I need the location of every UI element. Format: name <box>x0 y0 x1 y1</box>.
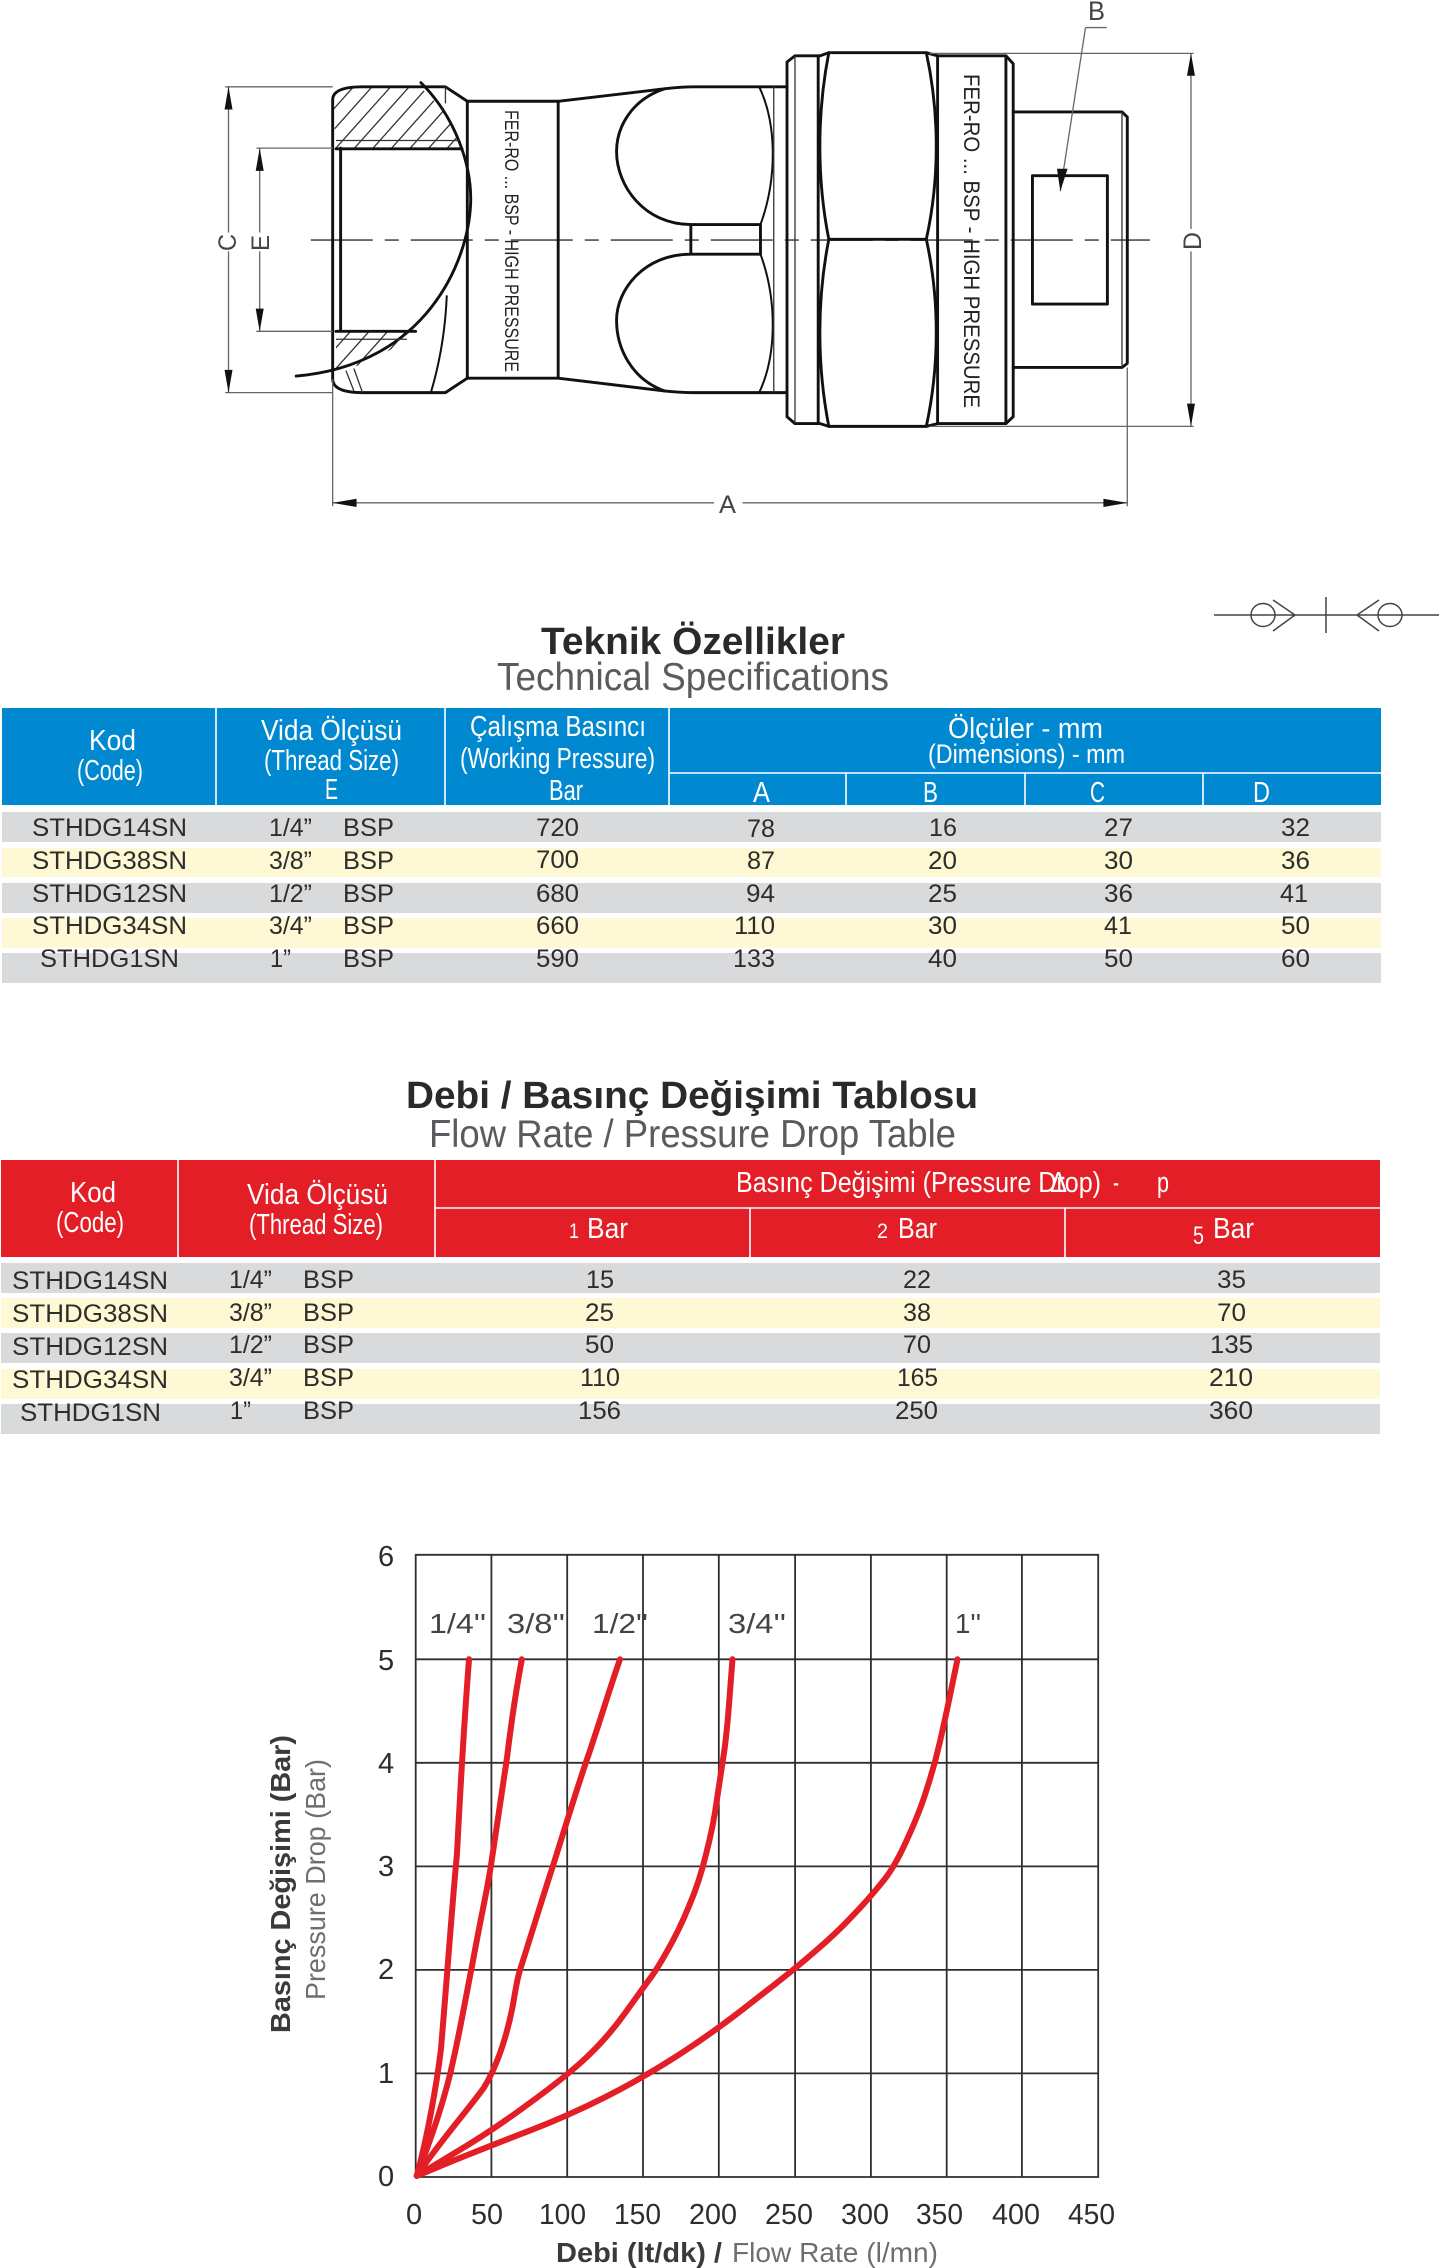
table rows: 1/2” <box>229 1331 272 1359</box>
table rows: 30 <box>1104 847 1133 875</box>
table rows <box>1 1263 1380 1434</box>
x axis ticks: 50 <box>471 2199 503 2231</box>
table rows: 25 <box>928 880 957 908</box>
table rows: 50 <box>1104 945 1133 973</box>
x axis ticks: 350 <box>916 2199 963 2231</box>
dimension letter E: E <box>247 235 275 251</box>
y axis ticks: 1 <box>378 2058 394 2090</box>
y axis ticks: 3 <box>378 1851 394 1883</box>
table rows: BSP <box>303 1364 354 1392</box>
table header: 1 <box>569 1220 579 1243</box>
dimension letter D: D <box>1179 232 1207 250</box>
y axis ticks: 5 <box>378 1645 394 1677</box>
table header: Kod <box>89 725 136 757</box>
table rows: 27 <box>1104 814 1133 842</box>
table rows: 680 <box>536 880 579 908</box>
y axis ticks: 6 <box>378 1541 394 1573</box>
table rows: 22 <box>903 1266 931 1294</box>
table header: Bar <box>587 1213 628 1245</box>
curve labels: 3/8'' <box>507 1608 565 1639</box>
table rows: BSP <box>343 945 394 973</box>
heading: technical specifications: Technical Specifications <box>497 656 889 699</box>
table header: Δ <box>1050 1167 1067 1199</box>
table rows: STHDG14SN <box>12 1267 168 1295</box>
table header: B <box>923 777 938 809</box>
table header: - <box>1113 1167 1119 1199</box>
table rows: 41 <box>1104 912 1132 940</box>
technical drawing: coupling <box>214 0 1207 519</box>
table rows: 87 <box>747 847 775 875</box>
x axis ticks: 300 <box>841 2199 889 2231</box>
x axis ticks: 200 <box>689 2199 737 2231</box>
curve labels: 1/2'' <box>592 1608 648 1639</box>
table rows: 15 <box>586 1266 614 1294</box>
table rows: BSP <box>303 1397 354 1425</box>
x axis ticks <box>406 2199 1115 2231</box>
chart grid <box>416 1555 1098 2177</box>
table rows: STHDG1SN <box>20 1399 161 1427</box>
table header: Bar <box>549 775 583 807</box>
table rows: 41 <box>1280 880 1308 908</box>
table rows: 3/4” <box>269 912 312 940</box>
table header: (Code) <box>56 1207 124 1239</box>
table rows: BSP <box>303 1331 354 1359</box>
table header <box>2 708 1381 809</box>
table rows: 50 <box>1281 912 1310 940</box>
x axis title <box>556 2237 938 2268</box>
table rows: STHDG34SN <box>32 912 187 940</box>
table rows: 3/8” <box>229 1299 272 1327</box>
table rows: 1/4” <box>229 1266 272 1294</box>
table rows: 70 <box>903 1331 931 1359</box>
table rows: 590 <box>536 945 579 973</box>
table header: Bar <box>898 1213 937 1245</box>
y axis title: Pressure Drop (Bar) <box>300 1759 331 2000</box>
table header: 5 <box>1193 1222 1204 1250</box>
table rows: 16 <box>929 814 957 842</box>
table rows: STHDG12SN <box>32 880 187 908</box>
table rows: STHDG14SN <box>32 814 187 842</box>
table header: Basınç Değişimi (Pressure Drop) <box>736 1167 1101 1199</box>
table header: E <box>325 774 338 806</box>
x axis title: Debi (lt/dk) / <box>556 2237 722 2268</box>
table rows: 156 <box>578 1397 621 1425</box>
engraved text on collar: FER-RO ... BSP - HIGH PRESSURE <box>959 74 984 408</box>
x axis ticks: 400 <box>992 2199 1040 2231</box>
table rows: 360 <box>1209 1397 1253 1425</box>
table rows: 36 <box>1104 880 1133 908</box>
table rows: STHDG38SN <box>12 1300 168 1328</box>
table rows: 60 <box>1281 945 1310 973</box>
icon: coupling symbol <box>1214 597 1439 633</box>
y axis ticks: 4 <box>378 1748 394 1780</box>
x axis ticks: 0 <box>406 2199 422 2231</box>
curve: 3/8 inch <box>417 1659 522 2176</box>
table rows: 32 <box>1281 814 1310 842</box>
table rows <box>2 812 1381 983</box>
heading: technical specifications <box>497 620 889 699</box>
table header: (Dimensions) - mm <box>928 739 1125 769</box>
table header: (Working Pressure) <box>460 743 655 775</box>
y axis title <box>265 1735 331 2033</box>
table rows: BSP <box>343 814 394 842</box>
table rows: STHDG1SN <box>40 945 179 973</box>
table rows: 660 <box>536 912 579 940</box>
table rows: BSP <box>343 880 394 908</box>
table rows: 3/8” <box>269 847 312 875</box>
heading: flow rate table: Debi / Basınç Değişimi Tablosu <box>406 1075 978 1117</box>
table rows: 35 <box>1217 1266 1246 1294</box>
table rows: BSP <box>343 847 394 875</box>
table rows: BSP <box>303 1299 354 1327</box>
threaded tail with flat <box>1013 112 1127 367</box>
table rows: 133 <box>733 945 775 973</box>
table rows: 250 <box>895 1397 938 1425</box>
table rows: 20 <box>928 847 957 875</box>
y axis ticks: 2 <box>378 1954 394 1986</box>
heading: technical specifications: Teknik Özellikler <box>541 620 845 663</box>
table header: (Thread Size) <box>264 745 399 777</box>
curve: 1/2 inch <box>417 1659 620 2176</box>
x axis title: Flow Rate (l/mn) <box>732 2237 938 2268</box>
table header: Kod <box>70 1177 116 1209</box>
table: flow rate and pressure drop <box>1 1160 1380 1434</box>
hatching <box>280 88 501 374</box>
table rows: 38 <box>903 1299 931 1327</box>
x axis ticks: 100 <box>539 2199 586 2231</box>
curve: 3/4 inch <box>417 1659 732 2176</box>
table header: Vida Ölçüsü <box>261 715 402 747</box>
table header: A <box>753 777 771 809</box>
chart curves <box>417 1659 958 2176</box>
y axis title: Basınç Değişimi (Bar) <box>265 1735 296 2033</box>
curve: 1/4 inch <box>417 1659 469 2176</box>
table rows: BSP <box>343 912 394 940</box>
table rows: STHDG12SN <box>12 1333 168 1361</box>
table rows: 70 <box>1217 1299 1246 1327</box>
dimension letter C: C <box>214 234 242 251</box>
table rows: 36 <box>1281 847 1310 875</box>
x axis ticks: 250 <box>765 2199 813 2231</box>
table rows: 25 <box>585 1299 614 1327</box>
table rows: 1/4” <box>269 814 312 842</box>
dimension lines <box>225 28 1195 507</box>
table header: D <box>1253 777 1270 809</box>
table rows: 135 <box>1210 1331 1253 1359</box>
table rows: 1” <box>230 1397 251 1425</box>
table: technical specifications <box>2 708 1381 983</box>
neck and body <box>467 87 787 393</box>
table header: Vida Ölçüsü <box>247 1179 388 1211</box>
y axis ticks: 0 <box>378 2161 394 2193</box>
table rows: 30 <box>928 912 957 940</box>
curve labels: 3/4'' <box>728 1608 786 1639</box>
table rows: 94 <box>746 880 775 908</box>
heading: flow rate table <box>406 1075 978 1156</box>
table rows: 78 <box>747 815 775 843</box>
collar and hex <box>787 53 1013 426</box>
table header <box>1 1160 1380 1257</box>
table rows: 3/4” <box>229 1364 272 1392</box>
curve labels <box>429 1608 981 1639</box>
x axis ticks: 150 <box>614 2199 661 2231</box>
x axis ticks: 450 <box>1068 2199 1115 2231</box>
curve labels: 1'' <box>955 1608 981 1639</box>
table rows: 720 <box>536 814 579 842</box>
table rows: STHDG38SN <box>32 847 187 875</box>
table rows: 110 <box>734 912 775 940</box>
table header: (Thread Size) <box>249 1209 383 1241</box>
table header: p <box>1157 1167 1169 1199</box>
table rows: STHDG34SN <box>12 1366 168 1394</box>
table rows: 165 <box>897 1364 938 1392</box>
left nut <box>296 83 471 393</box>
table header: Bar <box>1213 1213 1254 1245</box>
table rows: 1” <box>270 945 291 973</box>
table rows: 1/2” <box>269 880 312 908</box>
table rows: BSP <box>303 1266 354 1294</box>
centre line <box>311 239 1150 241</box>
dimension letter A: A <box>719 491 736 519</box>
heading: flow rate table: Flow Rate / Pressure Drop Table <box>429 1113 956 1156</box>
curve: 1 inch <box>417 1659 958 2176</box>
table rows: 210 <box>1209 1364 1253 1392</box>
table rows: 50 <box>585 1331 614 1359</box>
table header: (Code) <box>77 755 143 787</box>
table header: C <box>1090 777 1105 809</box>
table header: 2 <box>877 1220 888 1243</box>
table rows: 110 <box>580 1364 620 1392</box>
table rows: 700 <box>536 846 579 874</box>
table header: Ölçüler - mm <box>948 713 1103 745</box>
table header: Çalışma Basıncı <box>470 711 646 743</box>
curve labels: 1/4'' <box>429 1608 486 1639</box>
table rows: 40 <box>928 945 957 973</box>
chart: pressure drop vs flow rate <box>265 1541 1115 2268</box>
y axis ticks <box>378 1541 394 2193</box>
engraved text on nut: FER-RO ... BSP - HIGH PRESSURE <box>500 110 521 372</box>
